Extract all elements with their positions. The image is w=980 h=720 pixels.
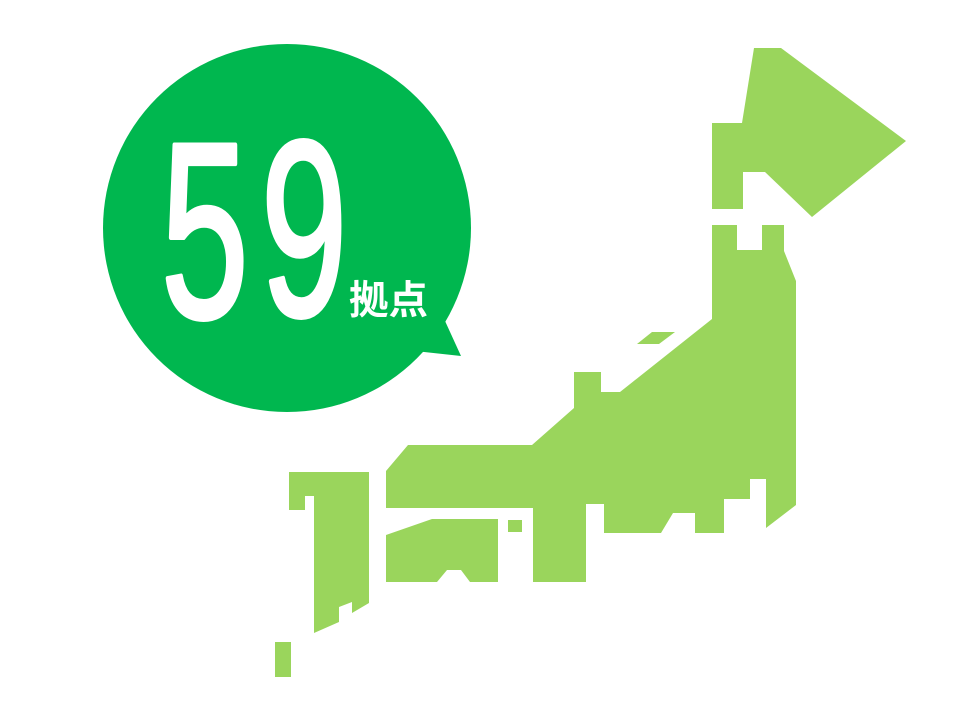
bubble circle [103, 44, 471, 412]
callout: speech bubble with count [103, 44, 471, 412]
region: Honshu [386, 225, 796, 582]
region: southern island [275, 642, 291, 677]
digit 5: 5 [161, 92, 249, 371]
region: Sado island [637, 332, 675, 344]
digit 9: 9 [261, 90, 347, 369]
region: Awaji island [508, 520, 522, 532]
region: Kyushu [289, 472, 369, 633]
region: Shikoku [386, 519, 498, 582]
map of Japan [275, 48, 906, 677]
region: Hokkaido [712, 48, 906, 217]
bubble tail [415, 310, 461, 356]
number: 59 [161, 90, 347, 371]
unit label: 拠点 [349, 279, 428, 323]
